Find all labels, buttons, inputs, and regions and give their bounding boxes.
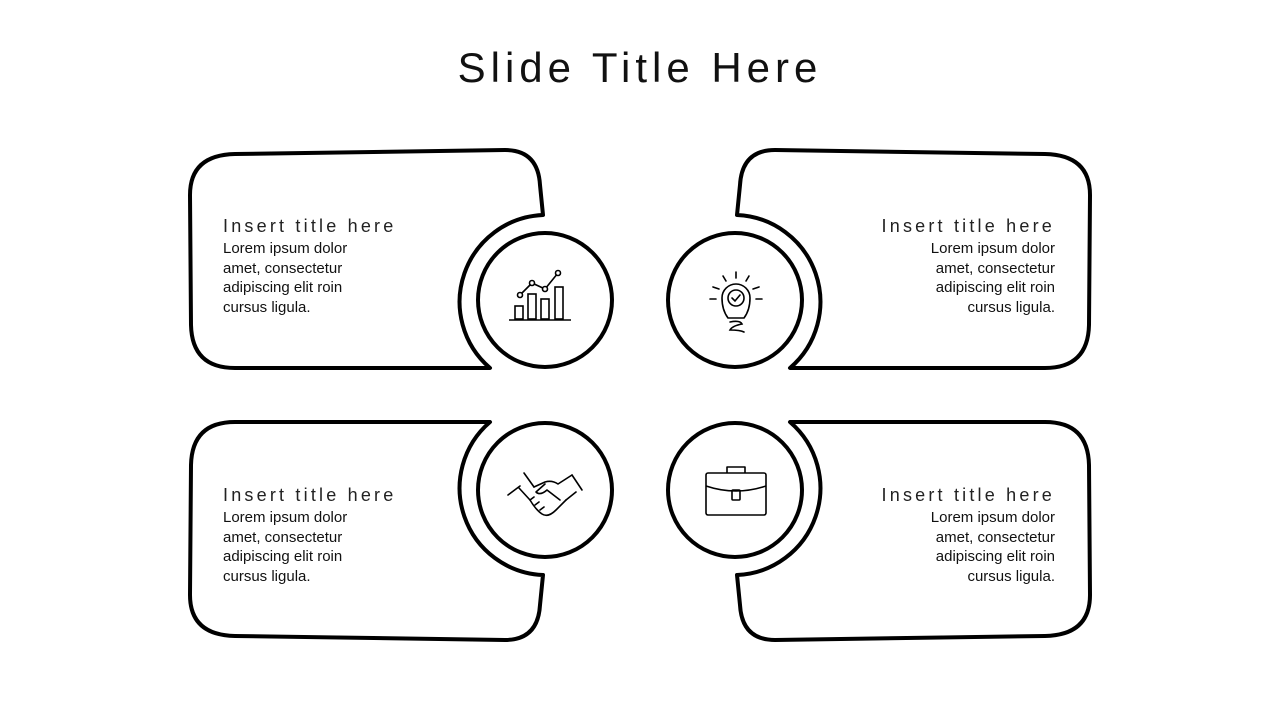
- text block: top-right: [882, 216, 1055, 316]
- icon: bar chart: [509, 270, 571, 320]
- text block: top-right: adipiscing elit roin: [936, 279, 1055, 296]
- text block: bottom-right: Insert title here: [882, 485, 1055, 505]
- text block: top-left: Insert title here: [223, 216, 396, 236]
- text block: bottom-left: cursus ligula.: [223, 568, 311, 584]
- text block: top-right: amet, consectetur: [936, 260, 1055, 276]
- icon: briefcase: [706, 467, 766, 515]
- icon: handshake: [508, 473, 582, 515]
- text block: top-left: amet, consectetur: [223, 260, 342, 276]
- text block: bottom-right: cursus ligula.: [967, 568, 1055, 584]
- panel: bottom-right: [668, 422, 1090, 640]
- text block: top-right: Insert title here: [882, 216, 1055, 236]
- text block: bottom-left: Lorem ipsum dolor: [223, 509, 347, 526]
- icon: lightbulb: [710, 272, 762, 332]
- text block: top-left: Lorem ipsum dolor: [223, 240, 347, 257]
- text block: top-left: cursus ligula.: [223, 298, 311, 316]
- text block: bottom-right: adipiscing elit roin: [936, 548, 1055, 565]
- text block: bottom-left: [223, 485, 396, 584]
- panel: bottom-left: [190, 422, 612, 640]
- text block: top-left: adipiscing elit roin: [223, 279, 342, 296]
- text block: bottom-left: Insert title here: [223, 485, 396, 505]
- text block: bottom-right: Lorem ipsum dolor: [931, 509, 1055, 526]
- text block: bottom-right: amet, consectetur: [936, 528, 1055, 546]
- text block: top-right: cursus ligula.: [967, 298, 1055, 316]
- panel: top-right: [668, 150, 1090, 368]
- text block: top-left: [223, 216, 396, 316]
- title: Slide Title Here: [458, 44, 822, 91]
- text block: bottom-left: amet, consectetur: [223, 528, 342, 546]
- text block: bottom-left: adipiscing elit roin: [223, 548, 342, 565]
- text block: bottom-right: [882, 485, 1055, 584]
- panel: top-left: [190, 150, 612, 368]
- text block: top-right: Lorem ipsum dolor: [931, 240, 1055, 257]
